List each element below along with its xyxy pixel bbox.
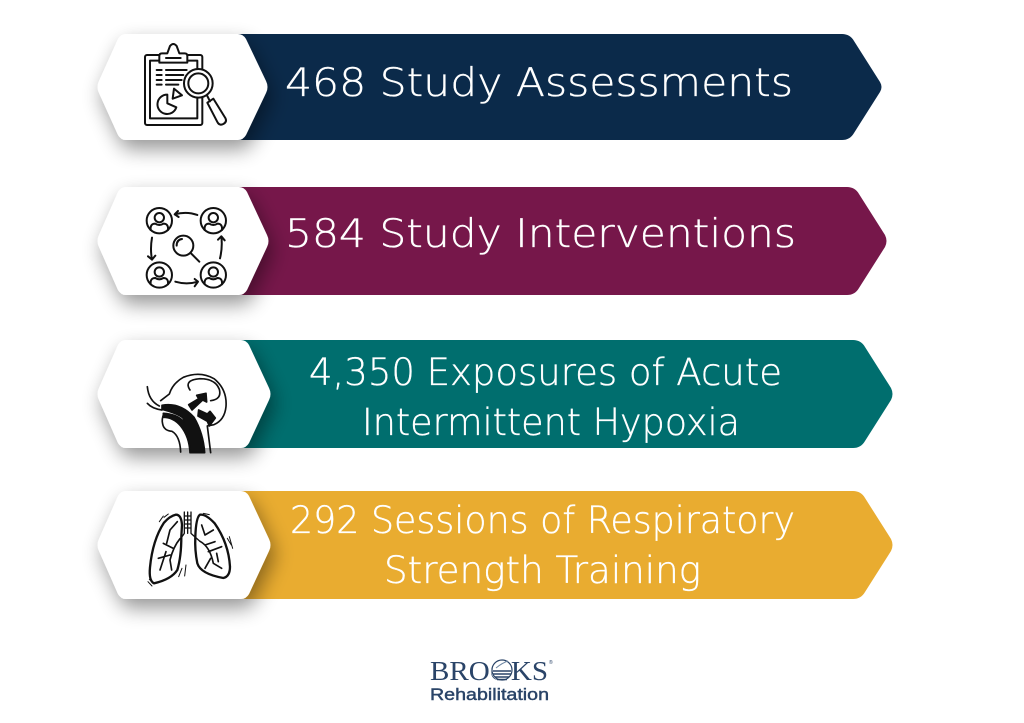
bar: maroon <box>200 187 886 295</box>
label: 468 Study Assessments <box>285 61 793 106</box>
hexagon: icon background <box>98 34 268 140</box>
logo: Brooks Rehabilitation <box>430 656 553 704</box>
logo: Brooks Rehabilitation: Rehabilitation <box>430 685 549 704</box>
row: 292 Sessions of Respiratory Strength Training <box>98 491 892 599</box>
logo: Brooks Rehabilitation: BROOKS <box>430 656 548 686</box>
row: 468 Study Assessments <box>98 34 882 140</box>
hexagon: icon background <box>98 187 268 295</box>
bar: navy <box>200 34 882 140</box>
label: Strength Training <box>384 549 701 592</box>
icon: clipboard with magnifier <box>145 44 226 125</box>
row: 584 Study Interventions <box>98 187 886 295</box>
logo mark: striped circle <box>491 659 513 681</box>
icon: head with airway arrows <box>147 374 226 453</box>
bar: teal <box>200 340 892 448</box>
label: 4,350 Exposures of Acute <box>309 351 782 394</box>
label <box>290 499 795 592</box>
label: 584 Study Interventions <box>285 212 796 257</box>
bar: gold <box>200 491 892 599</box>
row: 4,350 Exposures of Acute Intermittent Hypoxia <box>98 340 892 453</box>
hexagon: icon background <box>98 340 270 448</box>
label: 292 Sessions of Respiratory <box>290 499 795 542</box>
icon: four people around magnifier <box>147 208 226 288</box>
logo: Brooks Rehabilitation: ® <box>549 659 553 666</box>
label <box>309 351 782 444</box>
label: Intermittent Hypoxia <box>362 401 740 444</box>
icon: lungs <box>148 512 233 586</box>
hexagon: icon background <box>98 491 270 599</box>
